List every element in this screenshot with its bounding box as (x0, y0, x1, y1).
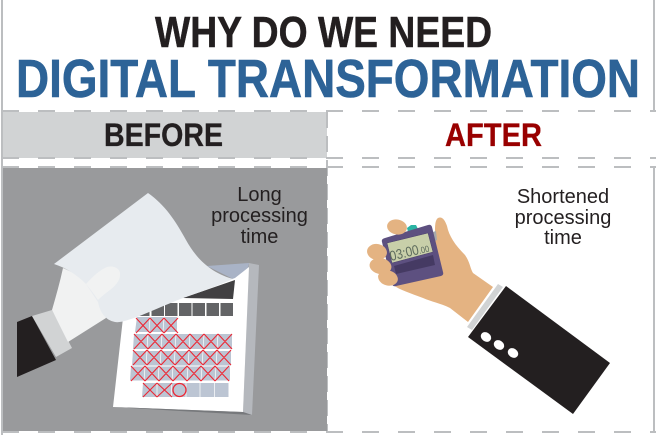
hand and forearm (378, 217, 493, 322)
shirt cuff (32, 310, 72, 357)
grey side button (433, 231, 437, 241)
suit sleeve (468, 286, 610, 414)
after caption: Shortened (517, 186, 609, 208)
panel: before illustration (3, 168, 327, 431)
before caption: time (241, 226, 278, 248)
red crosses (131, 318, 232, 397)
calendar day cells (130, 317, 232, 397)
before caption (211, 184, 308, 248)
panel: after illustration (366, 186, 611, 414)
sleeve (17, 316, 56, 377)
glove (52, 268, 106, 342)
thumb (86, 266, 120, 300)
stopwatch screen (387, 233, 433, 263)
title (16, 9, 640, 109)
teal stopwatch button (407, 225, 418, 232)
sleeve buttons (479, 330, 520, 360)
fingers (366, 218, 408, 288)
after heading: AFTER (445, 117, 542, 153)
title line 1: WHY DO WE NEED (155, 9, 492, 57)
stopwatch display band (394, 255, 435, 274)
after caption (515, 186, 611, 249)
turning page (54, 193, 233, 322)
icon: gloved hand holding page (17, 193, 233, 377)
icon: calendar (113, 263, 259, 415)
stopwatch body (382, 225, 443, 286)
stopwatch time: 03:00.00 (388, 239, 431, 264)
icon: hand holding stopwatch (366, 217, 610, 414)
before caption: Long (237, 184, 282, 206)
after caption: time (544, 227, 582, 249)
shirt cuff (467, 284, 503, 330)
before caption: processing (211, 205, 308, 227)
before heading: BEFORE (104, 117, 223, 153)
after caption: processing (515, 207, 611, 229)
panel: before header (3, 112, 327, 158)
